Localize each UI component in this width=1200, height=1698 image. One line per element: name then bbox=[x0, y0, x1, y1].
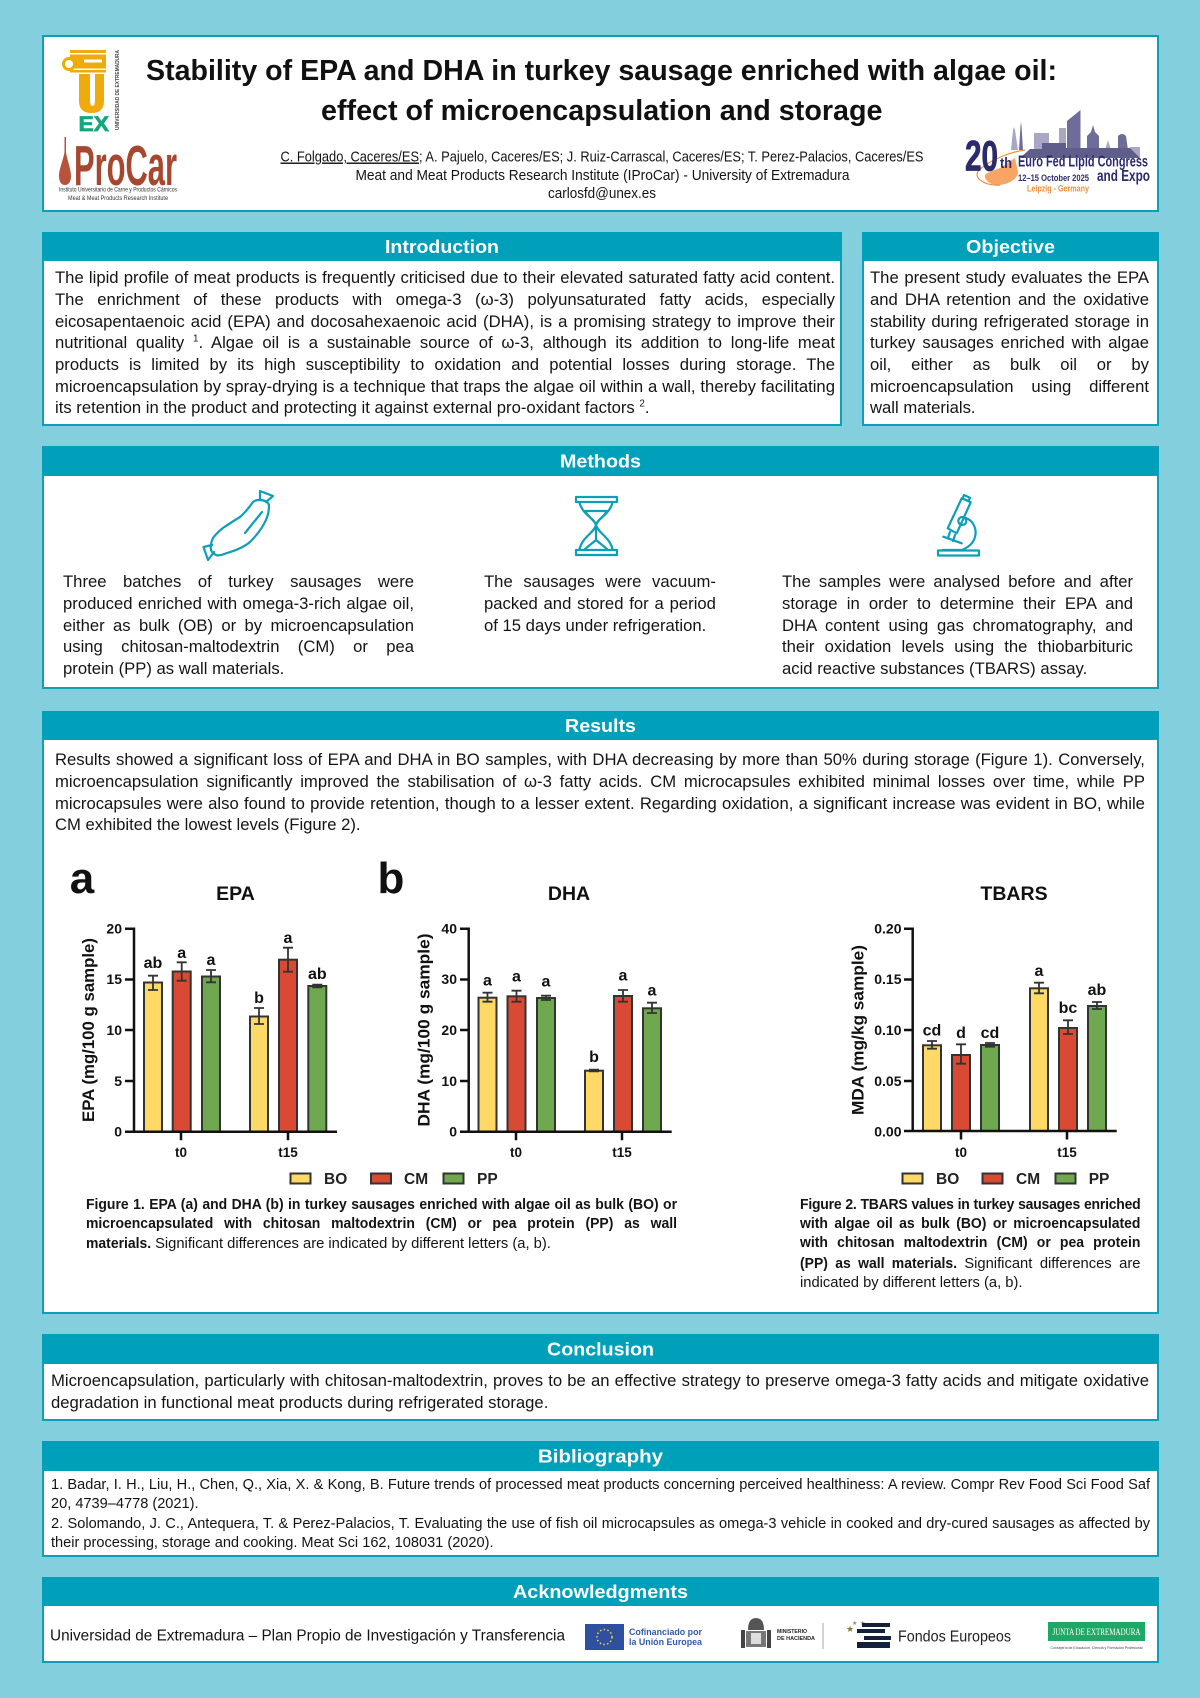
results text: Results showed a significant loss of EPA and DHA in BO samples, with DHA decreasing by more than 50% during storage (Figure 1). Conversely, bbox=[55, 750, 1145, 769]
objective text: The present study evaluates the EPA bbox=[870, 268, 1149, 287]
caption: figure 2: (PP) as wall materials. Significant differences are bbox=[800, 1255, 1140, 1272]
title bbox=[146, 55, 1057, 127]
methods text: analysis bbox=[782, 572, 1133, 678]
logo: Junta de Extremadura bbox=[1048, 1622, 1145, 1650]
icon: hourglass bbox=[574, 496, 618, 556]
introduction text: its retention in the product and protecting it against external pro-oxidant factors 2. bbox=[55, 398, 649, 417]
bar chart: TBARS bbox=[850, 883, 1117, 1160]
caption: figure 1: Figure 1. EPA (a) and DHA (b) in turkey sausages enriched with algae oil as bulk (BO) or bbox=[86, 1197, 677, 1213]
bar chart: EPA: EPA bbox=[216, 883, 255, 905]
heading: Introduction: Introduction bbox=[385, 237, 499, 257]
references bbox=[51, 1476, 1150, 1551]
logo: IProCar: Meat & Meat Products Research Institute bbox=[68, 196, 169, 202]
bar chart: TBARS: 0.00 bbox=[874, 1124, 902, 1140]
legend: figure 2: CM bbox=[1016, 1171, 1040, 1188]
objective text: oil, either as bulk oil or by bbox=[870, 355, 1149, 374]
logo: EU co-funding: Cofinanciado por bbox=[629, 1627, 702, 1638]
bar chart: EPA: 20 bbox=[106, 920, 122, 936]
title: Stability of EPA and DHA in turkey sausage enriched with algae oil: bbox=[146, 55, 1057, 87]
bar chart: TBARS: d bbox=[956, 1025, 966, 1042]
introduction text: The lipid profile of meat products is frequently criticised due to their elevated saturated fatty acid content. bbox=[55, 268, 835, 287]
bar chart: DHA: b bbox=[589, 1049, 599, 1066]
bar chart: DHA: 40 bbox=[441, 920, 457, 936]
caption: figure 1: materials. Significant differences are indicated by different letters (a, b). bbox=[86, 1235, 551, 1252]
logo: Fondos Europeos: Fondos Europeos bbox=[898, 1628, 1011, 1646]
caption: figure 2: with chitosan maltodextrin (CM) or pea protein bbox=[800, 1235, 1140, 1251]
icon: sausage bbox=[202, 490, 274, 562]
bar chart: DHA: t0 bbox=[510, 1145, 522, 1160]
heading: Methods bbox=[42, 446, 1159, 476]
panel: methods bbox=[42, 446, 1159, 689]
logo: Fondos Europeos bbox=[846, 1620, 1011, 1648]
bar chart: DHA: DHA (mg/100 g sample) bbox=[414, 934, 433, 1126]
caption: figure 1 bbox=[86, 1197, 677, 1252]
legend: figure 1: CM bbox=[404, 1171, 428, 1188]
heading: Objective: Objective bbox=[966, 237, 1055, 257]
logo: Fondos Europeos: ★ bbox=[860, 1620, 865, 1627]
legend: figure 2: BO bbox=[936, 1171, 959, 1188]
panel: objective bbox=[862, 232, 1159, 426]
objective text bbox=[870, 268, 1149, 417]
bar chart: EPA bbox=[70, 860, 337, 1160]
caption: figure 2: Figure 2. TBARS values in turkey sausages enriched bbox=[800, 1197, 1140, 1213]
logo: Ministerio de Hacienda: DE HACIENDA bbox=[777, 1636, 815, 1642]
legend: figure 2 bbox=[902, 1171, 1109, 1188]
panel: results bbox=[42, 711, 1159, 1314]
objective text: stability during refrigerated storage in bbox=[870, 312, 1149, 331]
heading: Acknowledgments: Acknowledgments bbox=[513, 1582, 688, 1602]
methods text: analysis: acid reactive substances (TBARS) assay. bbox=[782, 659, 1087, 678]
references: 2. Solomando, J. C., Antequera, T. & Perez-Palacios, T. Evaluating the use of fish oil microcapsules as omega-3 vehicle in cooked and dry-cured sausages as affected by bbox=[51, 1514, 1150, 1532]
logo: 20th Euro Fed Lipid Congress and Expo: 20 bbox=[965, 132, 998, 180]
results text: microcapsules were also found to provide retention, though to a lesser extent. Regarding oxidation, a significant increase was evident in BO, while bbox=[55, 794, 1145, 813]
bar chart: TBARS: cd bbox=[981, 1025, 999, 1042]
authors and affiliation bbox=[280, 150, 924, 202]
bar chart: TBARS: 0.05 bbox=[874, 1073, 902, 1089]
methods text: batches: either as bulk (OB) or by microencapsulation bbox=[63, 616, 414, 635]
heading: Results bbox=[42, 711, 1159, 740]
bar chart: EPA: 10 bbox=[106, 1022, 122, 1038]
objective text: microencapsulation using different bbox=[870, 377, 1149, 396]
methods text: analysis: DHA content using gas chromatography, and bbox=[782, 616, 1133, 635]
bar chart: TBARS: bc bbox=[1059, 1000, 1077, 1017]
bar chart: EPA: EPA (mg/100 g sample) bbox=[79, 938, 98, 1122]
bar chart: TBARS: a bbox=[1035, 963, 1044, 980]
legend: figure 1: PP bbox=[477, 1171, 498, 1188]
bar chart: TBARS: t0 bbox=[955, 1145, 967, 1160]
methods text: analysis: storage in order to determine their EPA and bbox=[782, 594, 1133, 613]
logo: Ministerio de Hacienda: MINISTERIO bbox=[777, 1629, 808, 1635]
panel: acknowledgments bbox=[42, 1577, 1159, 1663]
heading: Acknowledgments bbox=[42, 1577, 1159, 1606]
bar chart: EPA: a bbox=[207, 952, 216, 969]
logo: Fondos Europeos: ★ bbox=[846, 1624, 854, 1634]
introduction text: The enrichment of these products with omega-3 (ω-3) polyunsaturated fatty acids, especially bbox=[55, 290, 835, 309]
bar chart: TBARS: 0.10 bbox=[874, 1022, 902, 1038]
heading: Methods: Methods bbox=[560, 452, 641, 472]
conclusion text: degradation in functional meat products during refrigerated storage. bbox=[51, 1393, 548, 1412]
caption: figure 2: indicated by different letters (a, b). bbox=[800, 1274, 1022, 1291]
bar chart: EPA: 5 bbox=[114, 1073, 122, 1089]
logo: Fondos Europeos: ★ bbox=[852, 1620, 857, 1627]
heading: Bibliography bbox=[42, 1441, 1159, 1471]
methods text: storage bbox=[484, 572, 716, 635]
logo: 20th Euro Fed Lipid Congress and Expo: th bbox=[1000, 155, 1012, 172]
bar chart: DHA bbox=[378, 860, 672, 1160]
bar chart: EPA: ab bbox=[308, 966, 327, 983]
objective text: and DHA retention and the oxidative bbox=[870, 290, 1149, 309]
logo: 20th Euro Fed Lipid Congress and Expo: 12–15 October 2025 bbox=[1018, 173, 1090, 184]
bar chart: EPA: a bbox=[284, 930, 293, 947]
bar chart: DHA: a bbox=[619, 968, 628, 984]
methods text: batches bbox=[63, 572, 414, 678]
logo: 20th Euro Fed Lipid Congress and Expo bbox=[965, 110, 1150, 194]
methods text: batches: using chitosan-maltodextrin (CM) or pea bbox=[63, 637, 414, 656]
bar chart: TBARS: 0.15 bbox=[874, 971, 902, 987]
conclusion text bbox=[51, 1371, 1149, 1412]
logo: Universidad de Extremadura bbox=[62, 50, 121, 133]
bar chart: EPA: 0 bbox=[114, 1124, 122, 1140]
heading: Bibliography: Bibliography bbox=[538, 1446, 663, 1466]
methods text: storage: of 15 days under refrigeration. bbox=[484, 616, 706, 635]
bar chart: DHA: 20 bbox=[441, 1022, 457, 1038]
bar chart: DHA: 10 bbox=[441, 1073, 457, 1089]
references: their processing, storage and cooking. Meat Sci 162, 108031 (2020). bbox=[51, 1534, 494, 1551]
logo: 20th Euro Fed Lipid Congress and Expo: Leipzig - Germany bbox=[1027, 184, 1089, 194]
caption: figure 2: with algae oil as bulk (BO) or microencapsulated bbox=[800, 1216, 1140, 1232]
bar chart: DHA: a bbox=[512, 968, 521, 986]
bar chart: EPA: 15 bbox=[106, 971, 122, 987]
panel: bibliography bbox=[42, 1441, 1159, 1557]
introduction text bbox=[55, 268, 835, 417]
references: 1. Badar, I. H., Liu, H., Chen, Q., Xia, X. & Kong, B. Future trends of processed meat products concerning perceived healthiness: A review. Compr Rev Food Sci Food Saf bbox=[51, 1476, 1150, 1492]
methods text: batches: produced enriched with omega-3-rich algae oil, bbox=[63, 594, 414, 613]
title: effect of microencapsulation and storage bbox=[321, 95, 882, 127]
caption: figure 2 bbox=[800, 1197, 1140, 1291]
introduction text: products is limited by its high susceptibility to oxidation and potential losses during storage. The bbox=[55, 355, 835, 374]
legend: figure 1: BO bbox=[324, 1171, 347, 1188]
bar chart: EPA: a bbox=[177, 945, 186, 962]
legend: figure 1 bbox=[290, 1171, 498, 1188]
heading: Objective bbox=[862, 232, 1159, 261]
bar chart: EPA: t15 bbox=[278, 1145, 298, 1160]
methods text: storage: packed and stored for a period bbox=[484, 594, 716, 613]
heading: Conclusion bbox=[42, 1334, 1159, 1364]
heading: Results: Results bbox=[565, 716, 636, 736]
introduction text: microencapsulation by spray-drying is a technique that traps the algae oil within a wall, thereby facilitating bbox=[55, 377, 835, 396]
bar chart: EPA: ab bbox=[144, 955, 163, 972]
heading: Conclusion: Conclusion bbox=[547, 1340, 654, 1360]
bar chart: DHA: 30 bbox=[441, 971, 457, 987]
bar chart: DHA: a bbox=[542, 974, 551, 990]
results text: microencapsulation significantly improved the stabilisation of ω-3 fatty acids. CM microcapsules exhibited minimal losses over time, while PP bbox=[55, 772, 1145, 791]
bar chart: DHA: t15 bbox=[612, 1145, 632, 1160]
bar chart: DHA: a bbox=[483, 972, 492, 990]
methods text: analysis: The samples were analysed before and after bbox=[782, 572, 1133, 591]
methods text: storage: The sausages were vacuum- bbox=[484, 572, 716, 591]
authors and affiliation: carlosfd@unex.es bbox=[548, 186, 656, 202]
results text: CM exhibited the lowest levels (Figure 2). bbox=[55, 815, 361, 834]
bar chart: DHA: 0 bbox=[449, 1124, 457, 1140]
conclusion text: Microencapsulation, particularly with chitosan-maltodextrin, proves to be an effective strategy to preserve omega-3 fatty acids and mitigate oxidative bbox=[51, 1371, 1149, 1390]
icon: microscope bbox=[936, 494, 980, 557]
bar chart: TBARS: cd bbox=[923, 1022, 941, 1040]
introduction text: nutritional quality 1. Algae oil is a sustainable source of ω-3, although its addition to long-life meat bbox=[55, 333, 835, 352]
methods text: analysis: their oxidation levels using the thiobarbituric bbox=[782, 637, 1133, 656]
logo: EU co-funding bbox=[585, 1624, 703, 1650]
funding text: Universidad de Extremadura – Plan Propio de Investigación y Transferencia bbox=[50, 1628, 565, 1644]
bar chart: EPA: b bbox=[254, 990, 264, 1007]
panel: conclusion bbox=[42, 1334, 1159, 1421]
results text bbox=[55, 750, 1145, 834]
objective text: wall materials. bbox=[870, 398, 976, 417]
bar chart: DHA: DHA bbox=[548, 883, 590, 905]
methods text: batches: protein (PP) as wall materials. bbox=[63, 659, 284, 678]
panel: title header bbox=[42, 35, 1159, 212]
bar chart: DHA: a bbox=[648, 982, 657, 1000]
bar chart: EPA: t0 bbox=[175, 1145, 187, 1160]
logo: EU co-funding: la Unión Europea bbox=[629, 1637, 703, 1648]
heading: Introduction bbox=[42, 232, 842, 261]
bar chart: TBARS: TBARS bbox=[980, 883, 1048, 905]
references: 20, 4739–4778 (2021). bbox=[51, 1495, 199, 1512]
objective text: turkey sausages enriched with algae bbox=[870, 333, 1149, 352]
introduction text: eicosapentaenoic acid (EPA) and docosahexaenoic acid (DHA), is a promising strategy to improve their bbox=[55, 312, 835, 331]
panel: introduction bbox=[42, 232, 842, 426]
bar chart: TBARS: t15 bbox=[1057, 1145, 1077, 1160]
bar chart: TBARS: ab bbox=[1088, 982, 1107, 999]
caption: figure 1: microencapsulated with chitosan maltodextrin (CM) or pea protein (PP) as wall bbox=[86, 1216, 677, 1232]
methods text: batches: Three batches of turkey sausages were bbox=[63, 572, 414, 591]
logo: Ministerio de Hacienda bbox=[741, 1618, 824, 1649]
authors and affiliation: Meat and Meat Products Research Institute (IProCar) - University of Extremadura bbox=[356, 168, 850, 184]
bar chart: TBARS: 0.20 bbox=[874, 920, 902, 936]
legend: figure 2: PP bbox=[1089, 1171, 1109, 1188]
